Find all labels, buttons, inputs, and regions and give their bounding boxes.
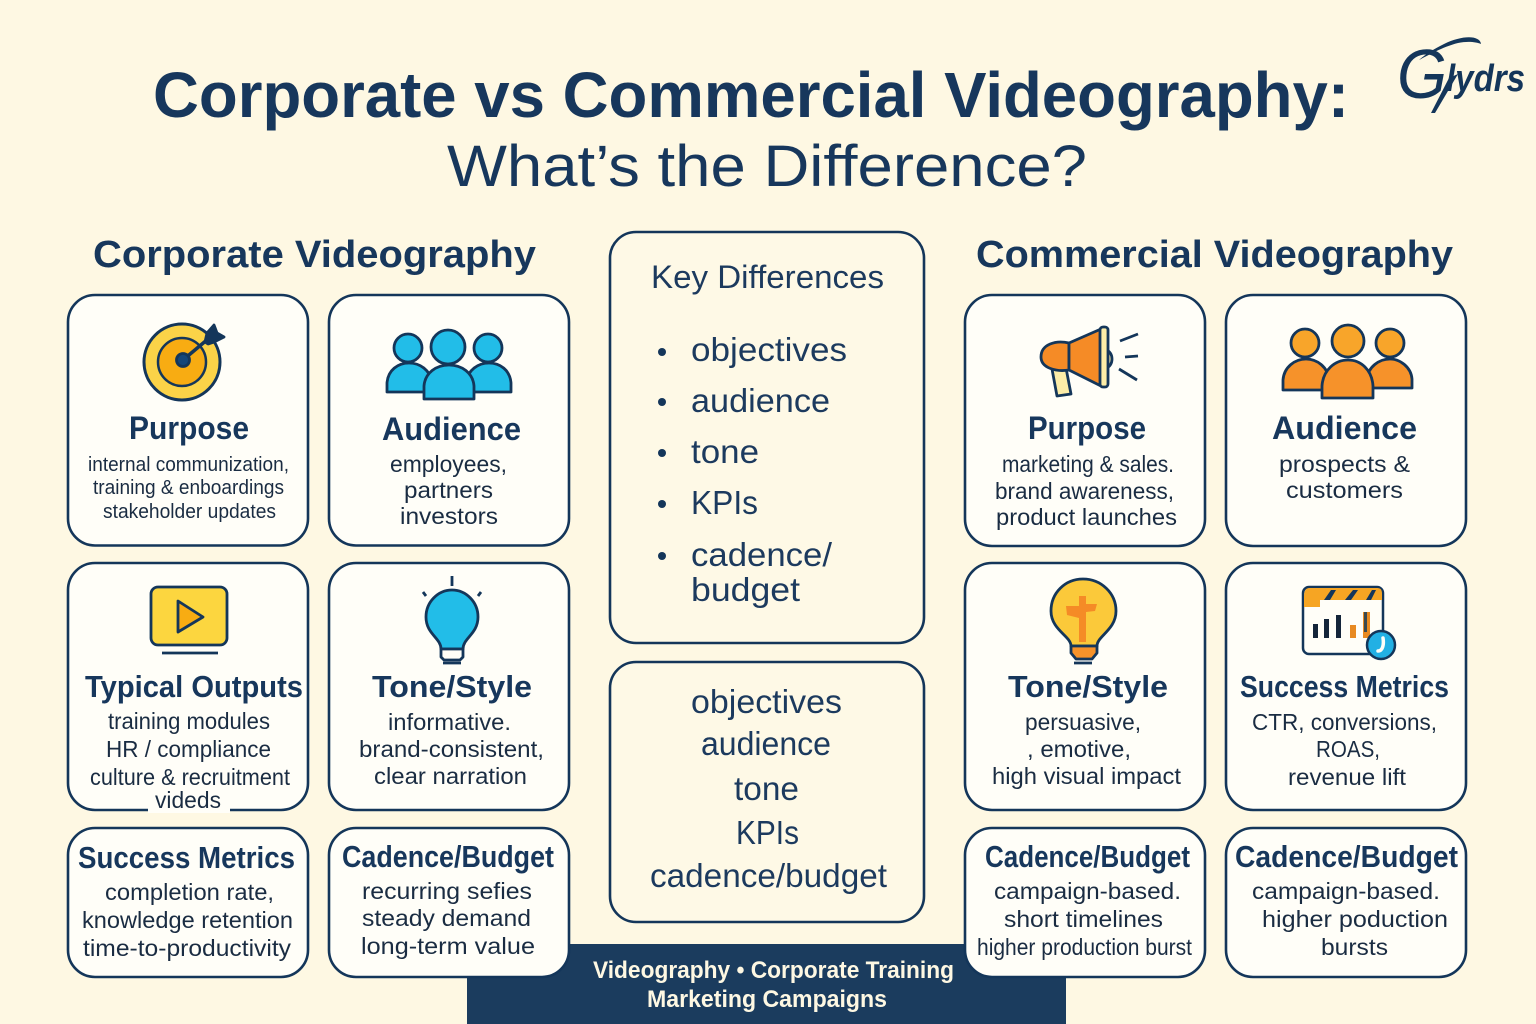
- panel: center summary: cadence/budget: [650, 857, 887, 894]
- panel: commercial tone: [965, 563, 1205, 810]
- logo: lydrs: [1446, 58, 1525, 100]
- panel: commercial purpose: brand awareness,: [995, 478, 1174, 504]
- icon: cyan people: [387, 330, 511, 399]
- bullet list: tone: [691, 433, 759, 470]
- panel: typical outputs: culture & recruitment: [90, 764, 291, 790]
- bullet list: audience: [691, 382, 830, 419]
- icon: orange people: [1283, 325, 1412, 398]
- panel: commercial purpose: Purpose: [1028, 410, 1146, 446]
- panel: commercial tone: high visual impact: [992, 763, 1182, 789]
- panel: corporate audience: Audience: [382, 411, 521, 447]
- panel: commercial success metrics: revenue lift: [1288, 764, 1407, 790]
- panel: corporate tone: [329, 563, 569, 810]
- panel: commercial cadence one: [965, 828, 1205, 977]
- panel: commercial tone: persuasive,: [1025, 709, 1141, 735]
- panel: commercial purpose: marketing & sales.: [1002, 451, 1174, 477]
- panel: commercial success metrics: ROAS,: [1316, 736, 1380, 762]
- heading: commercial videography: Commercial Videography: [976, 234, 1453, 276]
- panel: commercial cadence two: higher poduction: [1262, 906, 1448, 932]
- icon: cyan bulb: [423, 576, 481, 663]
- panel: commercial cadence two: [1226, 828, 1466, 977]
- bullet list: objectives: [691, 331, 847, 368]
- panel: commercial audience: Audience: [1272, 410, 1417, 446]
- panel: commercial cadence one: short timelines: [1004, 906, 1163, 932]
- title: What’s the Difference?: [447, 134, 1087, 199]
- panel: corporate tone: informative.: [388, 709, 511, 735]
- panel: typical outputs: Typical Outputs: [85, 669, 303, 704]
- panel: key differences: [610, 232, 924, 643]
- footer banner: Marketing Campaigns: [647, 986, 887, 1013]
- panel: commercial cadence two: campaign-based.: [1252, 878, 1440, 904]
- panel: corporate audience: employees,: [390, 451, 507, 477]
- panel: corporate success metrics: Success Metrics: [78, 840, 295, 875]
- bullet list: [658, 331, 847, 608]
- panel: corporate tone: brand-consistent,: [359, 736, 544, 762]
- panel: corporate purpose: training & enboardings: [93, 477, 284, 499]
- panel: corporate audience: investors: [400, 503, 498, 529]
- panel: commercial purpose: [965, 295, 1205, 546]
- panel: key differences: Key Differences: [651, 259, 884, 295]
- panel: corporate cadence: [329, 828, 569, 977]
- panel: corporate tone: clear narration: [374, 763, 527, 789]
- panel: commercial cadence two: Cadence/Budget: [1235, 839, 1458, 874]
- bullet list: budget: [691, 571, 800, 608]
- panel: commercial tone: , emotive,: [1027, 736, 1131, 762]
- panel: commercial success metrics: CTR, conversions,: [1252, 709, 1437, 735]
- bullet list: cadence/: [691, 536, 833, 573]
- panel: corporate cadence: Cadence/Budget: [342, 839, 554, 874]
- icon: calendar chart: [1303, 587, 1395, 659]
- panel: corporate purpose: [68, 295, 308, 546]
- panel: corporate success metrics: [68, 828, 308, 977]
- panel: commercial audience: customers: [1286, 477, 1403, 503]
- panel: typical outputs: [68, 563, 308, 813]
- logo: G: [1397, 35, 1447, 113]
- panel: corporate purpose: Purpose: [129, 410, 249, 446]
- icon: megaphone: [1041, 327, 1138, 396]
- panel: center summary: [610, 662, 924, 922]
- icon: video player: [151, 587, 227, 653]
- panel: corporate success metrics: completion rate,: [105, 879, 274, 905]
- title: [153, 59, 1349, 199]
- panel: corporate audience: partners: [404, 477, 493, 503]
- panel: commercial cadence two: bursts: [1321, 934, 1388, 960]
- panel: corporate purpose: internal communization,: [88, 454, 289, 476]
- panel: commercial cadence one: campaign-based.: [994, 878, 1181, 904]
- panel: center summary: KPIs: [736, 814, 799, 851]
- footer banner: Videography • Corporate Training: [593, 957, 954, 984]
- panel: commercial tone: Tone/Style: [1008, 669, 1168, 704]
- heading: corporate videography: Corporate Videography: [93, 234, 536, 276]
- panel: typical outputs: HR / compliance: [106, 736, 271, 762]
- panel: center summary: audience: [701, 725, 831, 762]
- panel: commercial audience: [1226, 295, 1466, 546]
- panel: corporate cadence: recurring sefies: [362, 878, 532, 904]
- panel: commercial audience: prospects &: [1279, 451, 1410, 477]
- panel: corporate purpose: stakeholder updates: [103, 501, 276, 523]
- panel: center summary: tone: [734, 770, 799, 807]
- bullet list: KPIs: [691, 484, 758, 521]
- panel: corporate success metrics: knowledge retention: [82, 907, 293, 933]
- logo: [1397, 35, 1525, 113]
- panel: corporate cadence: long-term value: [361, 933, 535, 959]
- panel: commercial success metrics: Success Metrics: [1240, 669, 1449, 704]
- icon: target: [144, 324, 224, 400]
- panel: commercial cadence one: higher production burst: [977, 934, 1193, 960]
- panel: corporate success metrics: time-to-productivity: [83, 935, 292, 961]
- icon: yellow bulb: [1051, 579, 1116, 663]
- panel: commercial success metrics: [1226, 563, 1466, 810]
- panel: typical outputs: videds: [155, 787, 221, 813]
- panel: center summary: objectives: [691, 683, 842, 720]
- panel: commercial purpose: product launches: [996, 504, 1177, 530]
- panel: typical outputs: training modules: [108, 708, 270, 734]
- title: Corporate vs Commercial Videography:: [153, 59, 1349, 131]
- panel: corporate cadence: steady demand: [362, 905, 531, 931]
- panel: corporate audience: [329, 295, 569, 546]
- panel: corporate tone: Tone/Style: [372, 669, 532, 704]
- footer banner: [467, 944, 1066, 1024]
- panel: commercial cadence one: Cadence/Budget: [985, 839, 1190, 874]
